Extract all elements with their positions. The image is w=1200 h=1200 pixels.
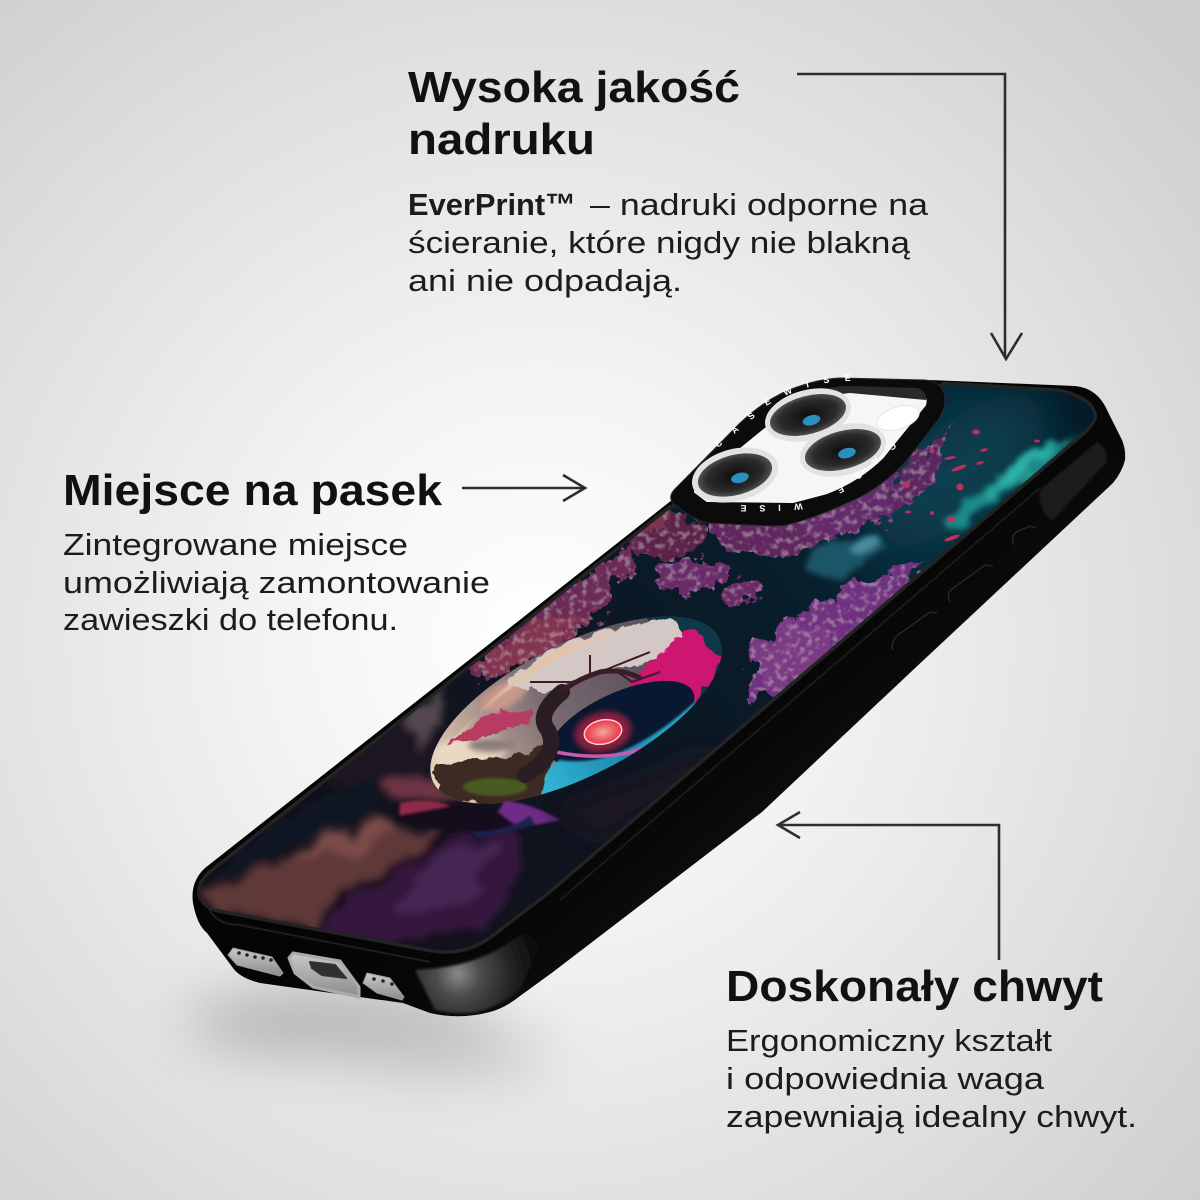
blue cloud <box>803 536 887 583</box>
body: print quality: EverPrint™ <box>408 187 576 222</box>
lens right <box>794 414 892 486</box>
body: print quality: ani nie odpadają. <box>408 263 682 298</box>
teal bright <box>985 442 1060 495</box>
brand right: CASE <box>838 444 896 494</box>
upper trunk <box>562 671 640 692</box>
petals <box>904 430 1040 543</box>
speaker left <box>228 948 283 976</box>
callout: print quality <box>408 63 929 298</box>
inner dark disk <box>554 680 694 763</box>
volume button one <box>892 612 937 650</box>
body: strap slot: Zintegrowane miejsce <box>63 527 408 562</box>
pink foliage <box>627 629 722 702</box>
arrow: print quality <box>797 74 1022 359</box>
moon glow <box>570 706 636 758</box>
corner metal highlight <box>415 932 540 1013</box>
teal nebula <box>945 432 1075 528</box>
heading: print quality: nadruku <box>408 115 595 164</box>
ground island <box>432 745 551 804</box>
body: grip: zapewniają idealny chwyt. <box>726 1099 1137 1134</box>
disk sky <box>430 616 722 804</box>
body: print quality: – nadruki odporne na <box>590 187 929 222</box>
cherry trees <box>470 425 955 699</box>
body: print quality: ścieranie, które nigdy nie blakną <box>408 225 911 260</box>
magenta rim <box>557 745 646 758</box>
camera island <box>670 374 946 526</box>
far hills <box>546 756 703 835</box>
bottom lip <box>207 905 430 962</box>
speaker right <box>363 973 404 1000</box>
upper teal haze <box>869 388 1064 554</box>
swirl <box>431 734 510 765</box>
body: print quality <box>408 187 929 298</box>
top shade <box>820 386 926 400</box>
speaker left holes <box>237 951 273 962</box>
usb port <box>289 953 359 997</box>
cyan water <box>540 702 705 800</box>
lens left <box>686 438 784 512</box>
volume button two <box>948 565 993 602</box>
artwork base <box>200 385 1094 950</box>
arrow: grip <box>778 812 999 960</box>
brand top: CASEWISE <box>716 374 850 447</box>
brand bottom: WISE <box>740 503 803 512</box>
body: strap slot: zawieszki do telefonu. <box>63 602 398 637</box>
moon disk <box>430 616 722 804</box>
heading: strap slot: Miejsce na pasek <box>63 466 443 515</box>
silent switch <box>1012 526 1036 545</box>
heading: grip: Doskonały chwyt <box>726 962 1103 1011</box>
tree branches <box>530 652 660 682</box>
arrow: strap slot <box>462 475 585 501</box>
blue wisp <box>848 532 882 558</box>
heading: print quality <box>408 63 740 164</box>
callout: grip <box>726 962 1137 1134</box>
case body <box>192 380 1125 1016</box>
body: strap slot: umożliwiają zamontowanie <box>63 565 490 600</box>
phone case <box>192 374 1126 1016</box>
ground shapes <box>205 690 525 945</box>
phone shadow <box>185 988 550 1078</box>
speaker right holes <box>372 977 394 986</box>
rosy cloud <box>480 676 532 714</box>
side groove <box>560 488 1040 900</box>
white foliage <box>505 618 690 692</box>
pale band <box>454 630 618 738</box>
side bump <box>1040 442 1107 521</box>
callout: strap slot <box>63 466 490 637</box>
body: grip: i odpowiednia waga <box>726 1061 1045 1096</box>
body: grip <box>726 1023 1137 1134</box>
usb opening <box>310 962 346 978</box>
dark teal right edge <box>646 616 722 706</box>
tree trunk <box>525 692 562 775</box>
heading: print quality: Wysoka jakość <box>408 63 740 112</box>
island frame <box>671 378 945 526</box>
small pink tree <box>448 708 530 742</box>
pool <box>394 798 560 838</box>
water dark <box>572 760 645 800</box>
artwork <box>200 385 1094 950</box>
lens top <box>759 379 857 451</box>
red moon <box>584 718 622 746</box>
body: strap slot <box>63 527 490 637</box>
flash <box>874 401 922 435</box>
artwork rim <box>200 385 1094 950</box>
body: grip: Ergonomiczny kształt <box>726 1023 1052 1058</box>
camera plate <box>695 393 926 502</box>
